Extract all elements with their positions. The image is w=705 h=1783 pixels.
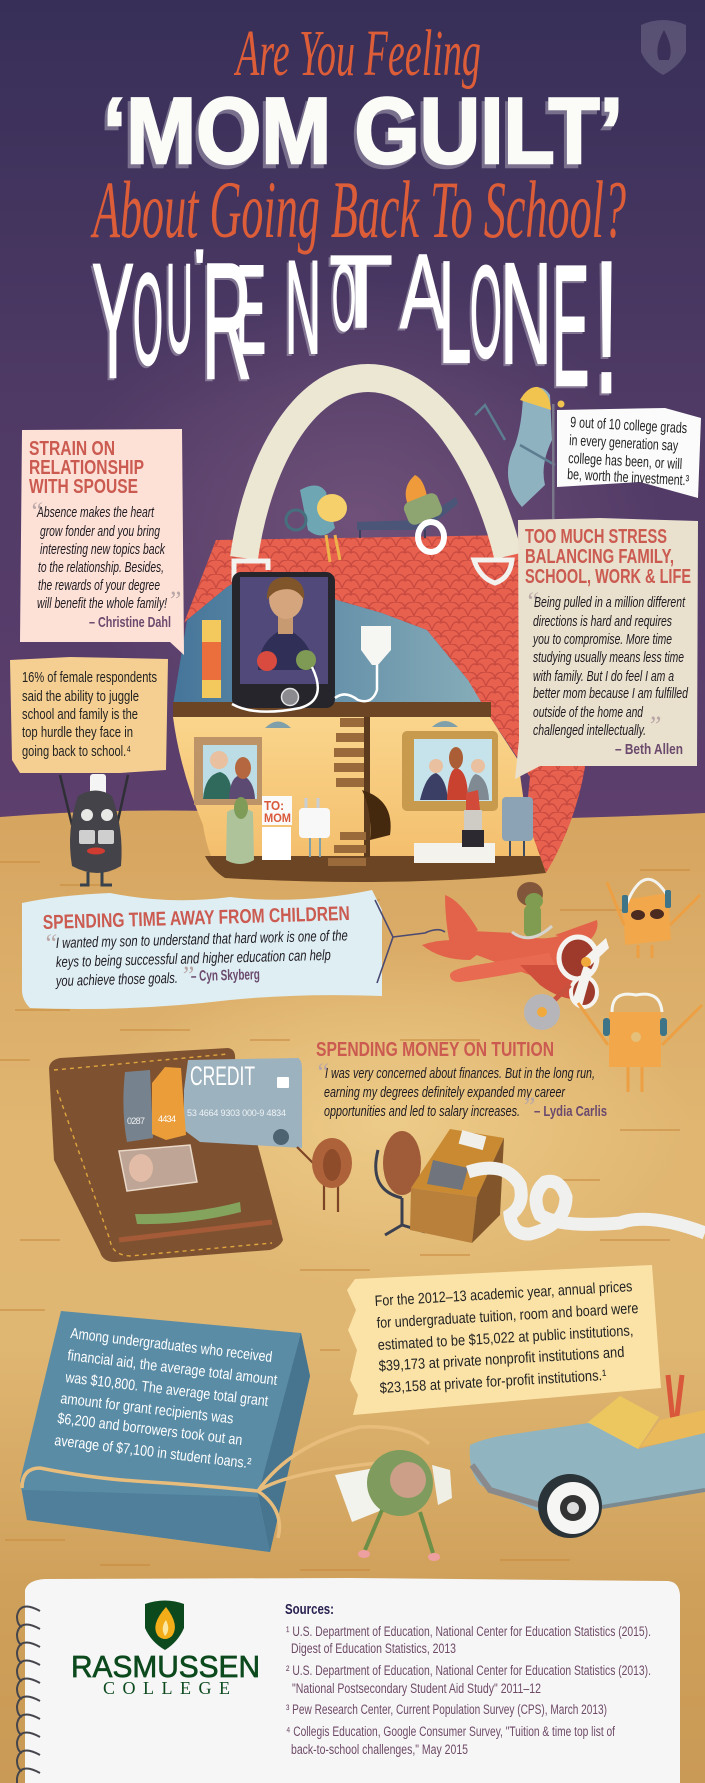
book text: amount for grant recipients was [60,1390,234,1428]
logo: rasmussen college: COLLEGE [103,1678,230,1698]
handbag illustration [173,378,585,882]
book text: financial aid, the average total amount [67,1347,279,1389]
heading: stress [525,526,691,588]
quote: christine dahl: interesting new topics back [40,541,166,558]
book text [54,1325,279,1472]
note: annual prices: For the 2012–13 academic year, annual prices [374,1278,633,1310]
penny body [383,1131,421,1195]
car windshield [587,1396,659,1449]
credit card [184,1058,302,1148]
quote: lydia carlis: I was very concerned about finances. But in the long run, [325,1065,595,1082]
character: green ball with crumpled paper [335,1450,452,1561]
store cards: 4434 [158,1114,176,1124]
quote: christine dahl: Absence makes the heart [36,504,155,521]
ceiling lamps [265,721,458,728]
quote: lydia carlis [315,1058,607,1121]
heading: strain: RELATIONSHIP [29,457,144,479]
quote: christine dahl: ” [167,586,181,615]
left picture frame [194,737,262,805]
quote: beth allen: challenged intellectually. [533,722,646,739]
title line: you're not alone: N [285,234,321,382]
title line: you're not alone: A [400,232,446,351]
plane tail fin [445,895,478,945]
character: penny holding card [297,1138,352,1212]
store cards: 0287 [127,1116,145,1126]
quote: christine dahl: to the relationship. Besides, [38,559,164,576]
to mom sign: TO: [264,798,284,813]
panel: strain on relationship with spouse [20,429,184,655]
character: lounging on deck chair [357,475,458,552]
plane fuselage [450,930,585,980]
quote: christine dahl: grow fonder and you bring [40,523,160,540]
panel: 16 percent stat: top hurdle they face in [22,724,133,741]
plane tail wing [422,940,490,960]
quote: christine dahl [29,497,181,631]
to mom sign [262,796,292,860]
flag: college worth it stat [552,400,701,519]
office chair [376,1150,425,1235]
bag buckles [234,560,512,583]
quote: cyn skyberg: ” [180,961,194,990]
quote: cyn skyberg: – Cyn Skyberg [191,966,260,985]
quote: beth allen: “ [525,587,539,616]
title line: you're not alone: O [470,238,502,385]
husband on screen [258,577,315,670]
heading: strain: STRAIN ON [29,438,115,460]
sources list [285,1601,651,1757]
title line: you're not alone: Y [92,231,134,413]
quote: lydia carlis: ” [521,1092,535,1121]
panel: 16 percent stat: said the ability to juggle [22,688,139,705]
title line: are you feeling: Are You Feeling [234,17,481,90]
bag blue upper room [173,572,492,705]
green bills [135,1202,241,1224]
credit card: 53 4664 9303 000-9 4834 [187,1108,286,1118]
background: purple sky [0,0,705,830]
title line: you're not alone: O [133,247,163,392]
quote: cyn skyberg: you achieve those goals. [55,970,178,990]
rubber band [22,1427,429,1538]
notebook: sources [17,1578,680,1783]
logo: rasmussen college: RASMUSSEN [71,1649,260,1684]
character: lipstick on table [414,790,495,863]
title line: you're not alone [92,224,619,433]
panel: 16 percent stat [10,657,168,773]
quote: beth allen: outside of the home and [533,704,643,721]
character: plug adapter [335,626,391,701]
title line: you're not alone: R [202,229,252,413]
character: cracker with sunglasses [607,879,700,958]
title line: you're not alone: T [329,235,393,350]
bag floors [173,702,546,882]
zipper [119,1222,272,1240]
bag lower room [173,717,546,882]
character: penny at desk with receipt [376,1129,705,1243]
bag red flap [184,535,585,873]
quote: lydia carlis: opportunities and led to salary increases. [324,1103,520,1120]
panel: too much stress [515,518,698,779]
quote: christine dahl: the rewards of your degree [38,577,160,594]
quote: christine dahl: “ [29,497,43,526]
home button [282,688,298,706]
title line: you're not alone: N [500,234,552,395]
blue book with rubber band [20,1311,429,1552]
receipt paper [468,1168,705,1234]
title line: you're not alone: U [166,238,193,379]
title [90,17,626,433]
desk [410,1129,504,1243]
note: annual prices: $23,158 at private for-profit institutions.¹ [379,1367,607,1397]
title line: mom guilt: ‘MOM GUILT’ [103,78,623,183]
title line: you're not alone: ' [193,238,206,303]
credit card: CREDIT [190,1061,255,1091]
sources list: "National Postsecondary Student Aid Study" 2011–12 [292,1681,541,1696]
pilot [517,882,543,937]
note: annual prices: $39,173 at private nonprofit institutions and [378,1344,625,1375]
character: blue with yellow bulb [286,485,347,562]
background: sandy ground [0,810,705,1783]
wheel [542,985,570,1012]
quote: beth allen: ” [647,711,661,740]
quote: lydia carlis: earning my degrees definitely expanded my career [324,1084,566,1101]
heading: spending money on tuition: SPENDING MONEY ON TUITION [316,1039,554,1061]
sources list: ³ Pew Research Center, Current Population Survey (CPS), March 2013) [286,1702,607,1717]
note: annual prices [347,1265,661,1415]
book text: Among undergraduates who received [70,1325,273,1366]
quote: christine dahl: – Christine Dahl [89,614,171,631]
logo watermark [641,20,686,75]
sources list: back-to-school challenges," May 2015 [291,1742,468,1757]
quote: cyn skyberg: keys to being successful and higher education can help [56,947,331,971]
character: green bottle [226,797,254,864]
car wheel [538,1474,602,1538]
title line: you're not alone: E [236,240,266,381]
car seat [640,1410,705,1447]
quote: lydia carlis: – Lydia Carlis [534,1103,607,1120]
title line: you're not alone: L [439,232,471,394]
quote: lydia carlis: “ [315,1058,329,1087]
id photo [119,1145,197,1191]
title line: you're not alone: E [552,230,589,423]
character: cracker with headphones [578,994,702,1092]
book text: average of $7,100 in student loans.² [54,1432,252,1472]
car body [470,1423,705,1512]
plane belly [520,965,582,1000]
character: wall plug [299,798,330,857]
quote: cyn skyberg: I wanted my son to understand that hard work is one of the [56,927,348,952]
title line: you're not alone: ! [594,224,619,433]
note: annual prices: for undergraduate tuition, room and board were [376,1300,639,1332]
character: car key fob [60,774,128,885]
bag handle [244,378,508,558]
right picture frame [402,731,498,811]
quote: cyn skyberg [43,927,348,990]
quote: beth allen [525,587,688,758]
adding machine [427,1160,468,1190]
plane lower wing [450,953,555,982]
character: gray box [502,797,533,856]
quote: cyn skyberg: “ [43,929,57,958]
quote: beth allen: – Beth Allen [615,741,683,758]
logo: rasmussen college [71,1600,260,1698]
spiral staircase [328,718,391,866]
panel: 16 percent stat: school and family is the [22,706,138,723]
panel: 16 percent stat: going back to school.⁴ [22,743,131,760]
airplane with pilot [422,882,609,1030]
banner rope [375,900,445,983]
spiral binding [17,1607,40,1783]
heading: strain [29,438,144,498]
wallet with cards [49,1048,302,1262]
heading: time away: SPENDING TIME AWAY FROM CHILDREN [42,903,350,934]
book text: $6,200 and borrowers took out an [57,1410,243,1449]
panel: 16 percent stat: 16% of female respondents [22,669,157,686]
convertible car [470,1375,705,1538]
character: climber with pick [475,387,555,507]
banner: spending time away from children [22,890,445,1009]
quote: christine dahl: will benefit the whole family! [37,595,168,612]
plane upper wing [555,920,598,945]
note: annual prices: estimated to be $15,022 at public institutions, [377,1322,634,1354]
title line: you're not alone: O [332,245,356,350]
book text: was $10,800. The average total grant [64,1369,270,1410]
phone with husband calling [232,572,335,712]
sources list: Sources: [285,1601,334,1618]
to mom sign: MOM [264,811,291,825]
call buttons [257,651,277,671]
sources list: Digest of Education Statistics, 2013 [291,1641,456,1656]
propeller [559,937,609,1007]
character: highlighter [202,620,221,698]
heading: strain: WITH SPOUSE [29,476,138,498]
pencils in back [668,1375,682,1440]
store cards [123,1067,186,1142]
